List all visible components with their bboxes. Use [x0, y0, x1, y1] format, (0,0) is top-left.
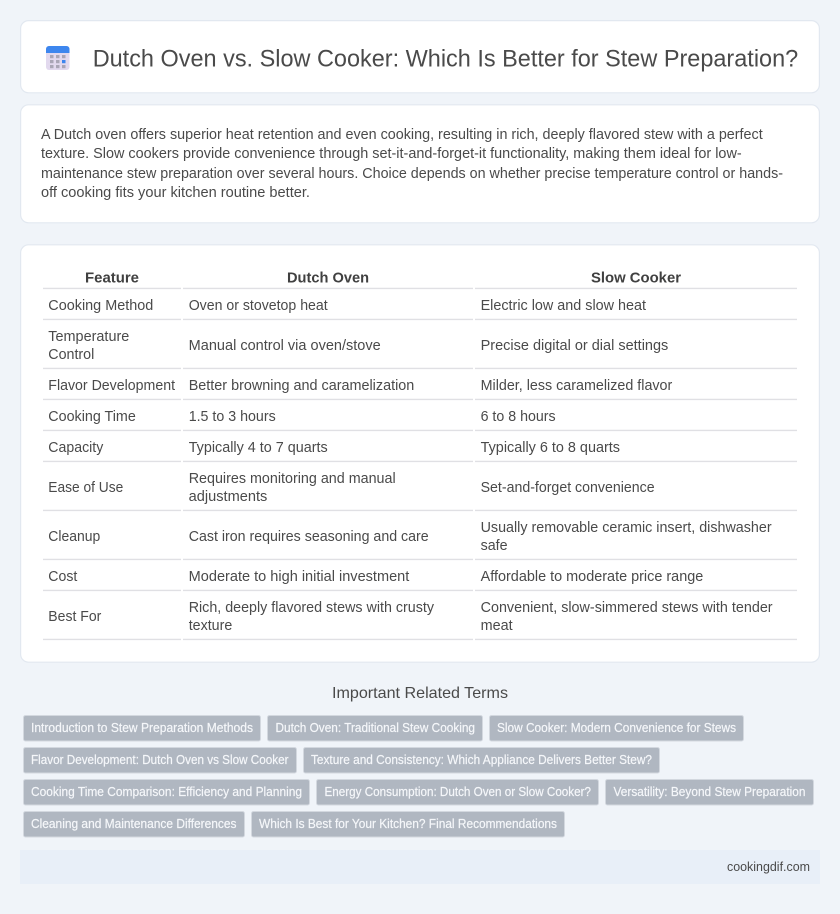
- row: cost: [43, 569, 797, 590]
- row: capacity: [43, 440, 797, 461]
- panel: related term tags: [24, 716, 814, 837]
- title: Dutch Oven vs. Slow Cooker: Which Is Better for Stew Preparation?: [93, 46, 798, 72]
- text block: introduction paragraph: off cooking fits your kitchen routine better.: [41, 185, 310, 201]
- row: cooking method: Oven or stovetop heat: [189, 298, 328, 314]
- row: flavor development: Milder, less caramelized flavor: [481, 378, 672, 394]
- footer: [20, 850, 820, 884]
- row: cleanup: safe: [481, 538, 508, 554]
- row: best for: meat: [481, 618, 513, 634]
- tag: slow cooker: [490, 716, 744, 741]
- tag: energy: [316, 780, 598, 805]
- tag: cleaning: [24, 812, 244, 837]
- tag: versatility: Versatility: Beyond Stew Preparation: [614, 785, 806, 799]
- tag: cooking time: [24, 780, 310, 805]
- row: cooking time: 1.5 to 3 hours: [189, 409, 276, 425]
- row: ease of use: Requires monitoring and manual: [189, 471, 396, 487]
- row: flavor development: Flavor Development: [48, 378, 175, 394]
- row: temperature control: Manual control via oven/stove: [189, 338, 381, 354]
- table header row: Slow Cooker: [591, 270, 681, 287]
- tag: cleaning: Cleaning and Maintenance Differences: [31, 817, 236, 831]
- row: temperature control: Control: [48, 347, 94, 363]
- tag: slow cooker: Slow Cooker: Modern Convenience for Stews: [497, 721, 736, 735]
- row: cleanup: Cleanup: [48, 529, 100, 545]
- table header row: Dutch Oven: [287, 270, 369, 287]
- text block: introduction paragraph: A Dutch oven offers superior heat retention and even cooking, resulting in rich, deeply flavored stew with a perfect: [41, 127, 763, 143]
- text block: introduction paragraph: texture. Slow cookers provide convenience through set-it-and-forget-it functionality, making them ideal for low-: [41, 146, 742, 162]
- table header row: Feature: [85, 270, 139, 287]
- row: capacity: Typically 4 to 7 quarts: [189, 440, 328, 456]
- row: ease of use: Set-and-forget convenience: [481, 480, 655, 496]
- tag: introduction: Introduction to Stew Preparation Methods: [31, 721, 253, 735]
- panel: introduction: [21, 105, 819, 223]
- row: cooking method: Cooking Method: [48, 298, 153, 314]
- tag: energy: Energy Consumption: Dutch Oven or Slow Cooker?: [324, 785, 591, 799]
- tag: versatility: [606, 780, 814, 805]
- tag: introduction: [24, 716, 260, 741]
- text block: introduction paragraph: maintenance stew preparation over several hours. Choice depends on whether precise temperature control or hands-: [41, 166, 783, 182]
- row: temperature control: Temperature: [48, 329, 129, 345]
- row: best for: [43, 600, 797, 639]
- row: temperature control: Precise digital or dial settings: [481, 338, 668, 354]
- tag: dutch oven: Dutch Oven: Traditional Stew Cooking: [276, 721, 475, 735]
- row: cooking time: Cooking Time: [48, 409, 136, 425]
- tag: texture: Texture and Consistency: Which Appliance Delivers Better Stew?: [311, 753, 652, 767]
- text block: introduction paragraph: [41, 127, 783, 201]
- row: best for: Convenient, slow-simmered stews with tender: [481, 600, 773, 616]
- row: temperature control: [43, 329, 797, 368]
- row: flavor development: Better browning and caramelization: [189, 378, 414, 394]
- tag: cooking time: Cooking Time Comparison: Efficiency and Planning: [31, 785, 302, 799]
- row: capacity: Capacity: [48, 440, 104, 456]
- row: cost: Cost: [48, 569, 77, 585]
- row: cleanup: Cast iron requires seasoning and care: [189, 529, 429, 545]
- row: cost: Moderate to high initial investment: [189, 569, 409, 585]
- panel: title header: [21, 21, 819, 93]
- row: cooking time: [43, 409, 797, 430]
- row: cleanup: [43, 520, 797, 559]
- row: flavor development: [43, 378, 797, 399]
- heading: important related terms: Important Related Terms: [332, 685, 508, 702]
- row: ease of use: Ease of Use: [48, 480, 123, 496]
- tag: flavor development: [24, 748, 296, 773]
- table header row: [43, 270, 797, 288]
- panel: comparison table: [21, 245, 819, 662]
- tag: flavor development: Flavor Development: Dutch Oven vs Slow Cooker: [31, 753, 288, 767]
- row: ease of use: adjustments: [189, 489, 267, 505]
- row: capacity: Typically 6 to 8 quarts: [481, 440, 620, 456]
- row: cooking time: 6 to 8 hours: [481, 409, 556, 425]
- row: best for: Rich, deeply flavored stews with crusty: [189, 600, 435, 616]
- tag: texture: [304, 748, 660, 773]
- row: cooking method: [43, 298, 797, 319]
- row: best for: Best For: [48, 609, 101, 625]
- row: best for: texture: [189, 618, 232, 634]
- tag: dutch oven: [268, 716, 482, 741]
- row: ease of use: [43, 471, 797, 510]
- tag: final recommendations: [252, 812, 564, 837]
- footer: cookingdif.com: [727, 859, 810, 874]
- row: cleanup: Usually removable ceramic insert, dishwasher: [481, 520, 772, 536]
- row: cost: Affordable to moderate price range: [481, 569, 703, 585]
- tag: final recommendations: Which Is Best for Your Kitchen? Final Recommendations: [259, 817, 557, 831]
- row: cooking method: Electric low and slow heat: [481, 298, 646, 314]
- icon: calendar: [46, 46, 70, 70]
